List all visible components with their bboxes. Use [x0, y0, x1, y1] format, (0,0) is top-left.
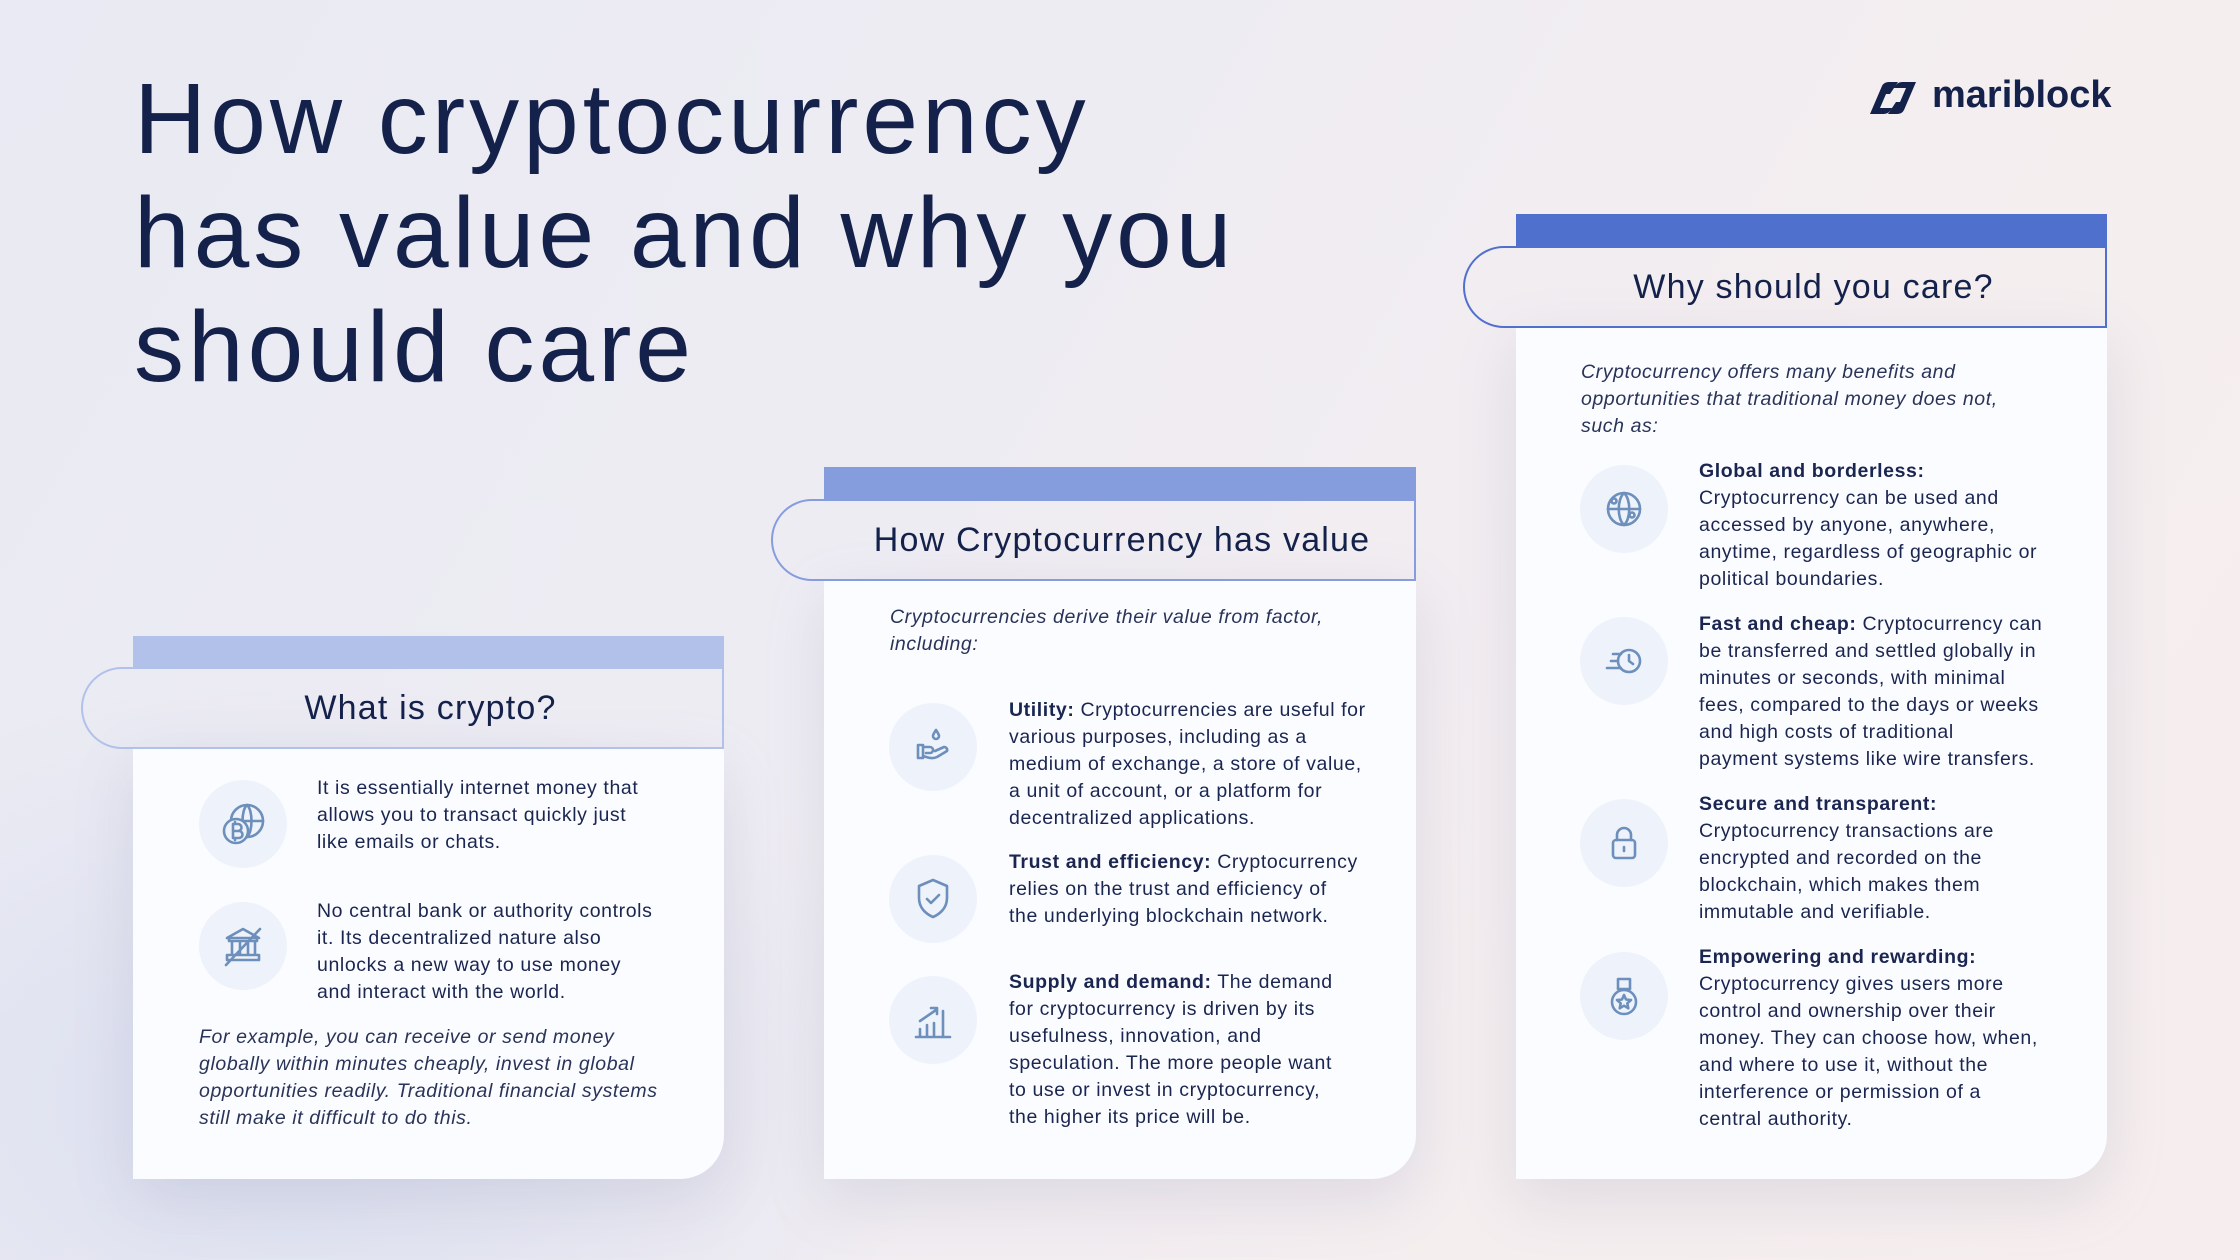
text: secure and transparent: encrypted and recorded on the — [1699, 847, 1982, 869]
text: utility — [1009, 699, 1366, 829]
icon: bitcoin globe — [199, 780, 287, 868]
text: global and borderless: Cryptocurrency can be used and — [1699, 487, 1999, 509]
heading: why should you care: Why should you care? — [1633, 268, 1994, 306]
text: utility: Utility: Cryptocurrencies are useful for — [1009, 699, 1366, 721]
text: fast and cheap — [1699, 613, 2042, 770]
icon: growth chart — [889, 976, 977, 1064]
text: fast and cheap: minutes or seconds, with minimal — [1699, 667, 2005, 689]
text: internet money: like emails or chats. — [317, 831, 501, 853]
text: global and borderless: accessed by anyone, anywhere, — [1699, 514, 1995, 536]
text: supply and demand: the higher its price will be. — [1009, 1106, 1251, 1128]
text: internet money — [317, 777, 638, 853]
heading: why should you care — [1463, 246, 2107, 328]
text: empowering and rewarding: Empowering and rewarding: — [1699, 946, 1976, 968]
title: should care — [134, 291, 695, 403]
text: global and borderless — [1699, 460, 2037, 590]
icon: medal — [1580, 952, 1668, 1040]
title — [134, 63, 1235, 403]
text: fast and cheap: and high costs of traditional — [1699, 721, 1954, 743]
text: no central bank — [317, 900, 652, 1003]
text: intro — [1581, 361, 1998, 437]
text: example: globally within minutes cheaply, invest in global — [199, 1053, 635, 1075]
text: example: still make it difficult to do this. — [199, 1107, 473, 1129]
text: intro — [890, 606, 1323, 655]
icon: lock — [1580, 799, 1668, 887]
text: internet money: allows you to transact quickly just — [317, 804, 626, 826]
text: fast and cheap: be transferred and settled globally in — [1699, 640, 2036, 662]
heading: what is crypto: What is crypto? — [304, 688, 557, 726]
icon: shield — [889, 855, 977, 943]
panel: what is crypto — [81, 636, 732, 1208]
icon: crossed bank — [199, 902, 287, 990]
text: empowering and rewarding: central authority. — [1699, 1108, 1853, 1130]
heading: how cryptocurrency has value — [771, 499, 1416, 581]
text: empowering and rewarding: interference or permission of a — [1699, 1081, 1981, 1103]
text: supply and demand: speculation. The more people want — [1009, 1052, 1332, 1074]
text: empowering and rewarding: money. They can choose how, when, — [1699, 1027, 2038, 1049]
text: empowering and rewarding: and where to use it, without the — [1699, 1054, 1988, 1076]
icon: globe — [1580, 465, 1668, 553]
text: example — [199, 1026, 658, 1129]
text: supply and demand: usefulness, innovation, and — [1009, 1025, 1262, 1047]
text: supply and demand — [1009, 971, 1333, 1128]
text: no central bank: and interact with the world. — [317, 981, 566, 1003]
heading: what is crypto — [81, 667, 724, 749]
text: internet money: It is essentially internet money that — [317, 777, 638, 799]
text: fast and cheap: Fast and cheap: Cryptocurrency can — [1699, 613, 2042, 635]
title: How cryptocurrency — [134, 63, 1090, 175]
text: empowering and rewarding: Cryptocurrency gives users more — [1699, 973, 2004, 995]
icon: fast clock — [1580, 617, 1668, 705]
text: intro: such as: — [1581, 415, 1658, 437]
text: empowering and rewarding: control and ownership over their — [1699, 1000, 1996, 1022]
text: trust and efficiency: Trust and efficiency: Cryptocurrency — [1009, 851, 1358, 873]
text: supply and demand: to use or invest in cryptocurrency, — [1009, 1079, 1320, 1101]
text: global and borderless: political boundaries. — [1699, 568, 1884, 590]
text: utility: a unit of account, or a platform for — [1009, 780, 1322, 802]
text: empowering and rewarding — [1699, 946, 2038, 1130]
icon: hand with drop — [889, 703, 977, 791]
title: has value and why you — [134, 177, 1235, 289]
text: example: opportunities readily. Traditional financial systems — [199, 1080, 658, 1102]
heading: how cryptocurrency has value: How Cryptocurrency has value — [874, 520, 1370, 558]
text: no central bank: No central bank or authority controls — [317, 900, 652, 922]
text: fast and cheap: fees, compared to the days or weeks — [1699, 694, 2039, 716]
text: utility: medium of exchange, a store of value, — [1009, 753, 1362, 775]
text: utility: various purposes, including as a — [1009, 726, 1307, 748]
text: supply and demand: Supply and demand: The demand — [1009, 971, 1333, 993]
text: secure and transparent: Secure and transparent: — [1699, 793, 1937, 815]
text: no central bank: it. Its decentralized nature also — [317, 927, 601, 949]
text: intro: including: — [890, 633, 978, 655]
text: global and borderless: Global and borderless: — [1699, 460, 1925, 482]
text: example: For example, you can receive or send money — [199, 1026, 614, 1048]
text: utility: decentralized applications. — [1009, 807, 1255, 829]
text: supply and demand: for cryptocurrency is driven by its — [1009, 998, 1315, 1020]
text: no central bank: unlocks a new way to use money — [317, 954, 621, 976]
text: secure and transparent — [1699, 793, 1994, 923]
text: trust and efficiency — [1009, 851, 1358, 927]
text: intro: Cryptocurrency offers many benefits and — [1581, 361, 1956, 383]
text: intro: Cryptocurrencies derive their value from factor, — [890, 606, 1323, 628]
text: secure and transparent: blockchain, which makes them — [1699, 874, 1980, 896]
panel: how crypto has value — [771, 467, 1428, 1211]
text: global and borderless: anytime, regardless of geographic or — [1699, 541, 2037, 563]
text: trust and efficiency: the underlying blockchain network. — [1009, 905, 1329, 927]
panel: why should you care — [1463, 214, 2119, 1211]
text: trust and efficiency: relies on the trust and efficiency of — [1009, 878, 1327, 900]
logo: mariblock: mariblock — [1932, 74, 2112, 116]
text: secure and transparent: immutable and verifiable. — [1699, 901, 1931, 923]
text: fast and cheap: payment systems like wire transfers. — [1699, 748, 2035, 770]
text: intro: opportunities that traditional money does not, — [1581, 388, 1998, 410]
text: secure and transparent: Cryptocurrency transactions are — [1699, 820, 1994, 842]
